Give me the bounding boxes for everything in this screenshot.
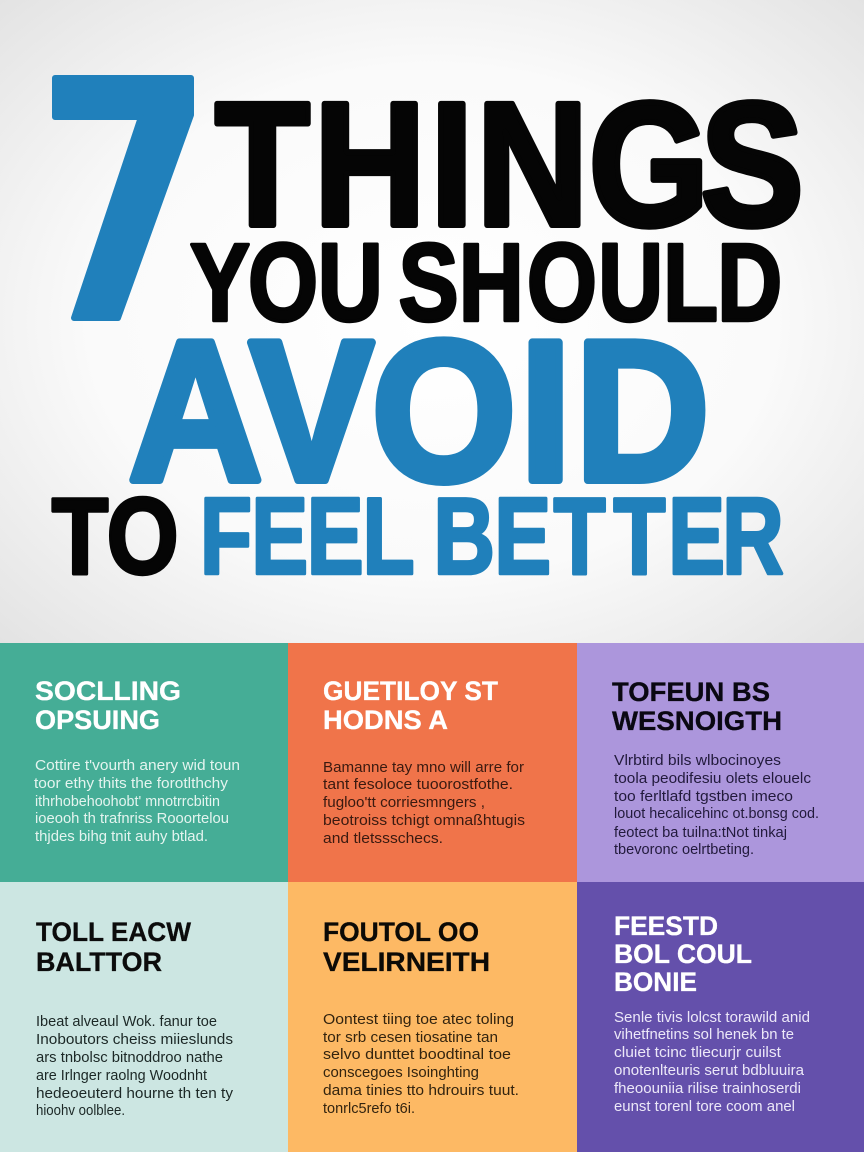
heading: purple panel: BOL COUL bbox=[614, 939, 752, 969]
body text: mint panel: hioohv oolblee. bbox=[36, 1103, 125, 1119]
background bbox=[0, 0, 864, 643]
heading: purple panel: BONIE bbox=[614, 967, 697, 997]
body text: purple panel: cluiet tcinc tliecurjr cuilst bbox=[614, 1045, 781, 1061]
heading: mint panel bbox=[36, 917, 191, 977]
body text: orange panel: tant fesoloce tuoorostfothe. bbox=[323, 777, 513, 793]
heading: lilac panel bbox=[612, 677, 782, 736]
heading: teal panel: OPSUING bbox=[35, 705, 160, 735]
heading: amber panel: FOUTOL OO bbox=[323, 917, 479, 947]
body text: orange panel bbox=[323, 760, 525, 847]
heading: lilac panel: WESNOIGTH bbox=[612, 706, 782, 736]
body text: orange panel: Bamanne tay mno will arre for bbox=[323, 760, 524, 776]
title line: TO: TO bbox=[52, 475, 179, 597]
heading: purple panel bbox=[614, 911, 752, 997]
body text: amber panel: selvo dunttet boodtinal toe bbox=[323, 1047, 511, 1063]
heading: mint panel: BALTTOR bbox=[36, 947, 162, 977]
heading: teal panel: SOCLLING bbox=[35, 676, 181, 706]
panel: mint bbox=[0, 882, 288, 1152]
body text: mint panel: ars tnbolsc bitnoddroo nathe bbox=[36, 1050, 223, 1066]
body text: orange panel: fugloo'tt corriesmngers , bbox=[323, 795, 485, 811]
heading: mint panel: TOLL EACW bbox=[36, 917, 191, 947]
body text: lilac panel: toola peodifesiu olets elouelc bbox=[614, 771, 811, 787]
body text: amber panel: Oontest tiing toe atec toling bbox=[323, 1012, 514, 1028]
body text: amber panel bbox=[323, 1012, 519, 1117]
panel: lilac bbox=[577, 643, 864, 882]
panel: teal bbox=[0, 643, 288, 882]
heading: orange panel: GUETILOY ST bbox=[323, 676, 498, 706]
body text: amber panel: conscegoes Isoinghting bbox=[323, 1065, 479, 1081]
panel: orange bbox=[288, 643, 577, 882]
body text: teal panel: thjdes bihg tnit auhy btlad. bbox=[35, 829, 208, 845]
heading: lilac panel: TOFEUN BS bbox=[612, 677, 770, 707]
body text: amber panel: dama tinies tto hdrouirs tuut. bbox=[323, 1083, 519, 1099]
body text: lilac panel: Vlrbtird bils wlbocinoyes bbox=[614, 753, 781, 769]
body text: mint panel: are Irlnger raolng Woodnht bbox=[36, 1068, 207, 1084]
body text: orange panel: and tletssschecs. bbox=[323, 831, 443, 847]
body text: lilac panel: louot hecalicehinc ot.bonsg cod. bbox=[614, 806, 819, 822]
panel: purple bbox=[577, 882, 864, 1152]
numeral 7 bbox=[55, 78, 191, 318]
body text: lilac panel bbox=[614, 753, 819, 858]
body text: teal panel: toor ethy thits the forotlthchy bbox=[34, 776, 229, 792]
body text: mint panel: Inoboutors cheiss miieslunds bbox=[36, 1032, 233, 1048]
body text: mint panel: Ibeat alveaul Wok. fanur toe bbox=[36, 1014, 217, 1030]
body text: purple panel bbox=[614, 1010, 810, 1115]
body text: lilac panel: tbevoronc oelrtbeting. bbox=[614, 842, 754, 858]
body text: mint panel: hedeoeuterd hourne th ten ty bbox=[36, 1086, 234, 1102]
body text: teal panel bbox=[34, 758, 240, 845]
body text: amber panel: tonrlc5refo t6i. bbox=[323, 1101, 415, 1117]
title line: THINGS: THINGS bbox=[215, 67, 804, 263]
body text: purple panel: onotenlteuris serut bdbluuira bbox=[614, 1063, 805, 1079]
heading: orange panel bbox=[323, 676, 498, 735]
title line: AVOID: AVOID bbox=[128, 299, 710, 522]
panel: amber bbox=[288, 882, 577, 1152]
heading: teal panel bbox=[35, 676, 181, 735]
body text: purple panel: eunst torenl tore coom anel bbox=[614, 1099, 795, 1115]
body text: lilac panel: feotect ba tuilna:tNot tinkaj bbox=[614, 825, 787, 841]
heading: amber panel bbox=[323, 917, 490, 977]
body text: teal panel: ioeooh th trafnriss Rooortelou bbox=[35, 811, 229, 827]
body text: orange panel: beotroiss tchigt omnaßhtugis bbox=[323, 813, 525, 829]
title bbox=[52, 67, 804, 597]
body text: purple panel: fheoouniia rilise trainhoserdi bbox=[614, 1081, 801, 1097]
heading: orange panel: HODNS A bbox=[323, 705, 448, 735]
body text: purple panel: Senle tivis lolcst torawild anid bbox=[614, 1010, 810, 1026]
body text: teal panel: ithrhobehoohobt' mnotrrcbitin bbox=[35, 794, 220, 810]
body text: lilac panel: too ferltlafd tgstben imeco bbox=[614, 789, 793, 805]
title line: YOU SHOULD: YOU SHOULD bbox=[190, 222, 782, 345]
heading: purple panel: FEESTD bbox=[614, 911, 718, 941]
body text: purple panel: vihetfnetins sol henek bn te bbox=[614, 1027, 794, 1043]
heading: amber panel: VELIRNEITH bbox=[323, 947, 490, 977]
body text: teal panel: Cottire t'vourth anery wid toun bbox=[35, 758, 240, 774]
body text: mint panel bbox=[36, 1014, 234, 1119]
body text: amber panel: tor srb cesen tiosatine tan bbox=[323, 1030, 498, 1046]
title line: FEEL BETTER: FEEL BETTER bbox=[200, 475, 784, 597]
